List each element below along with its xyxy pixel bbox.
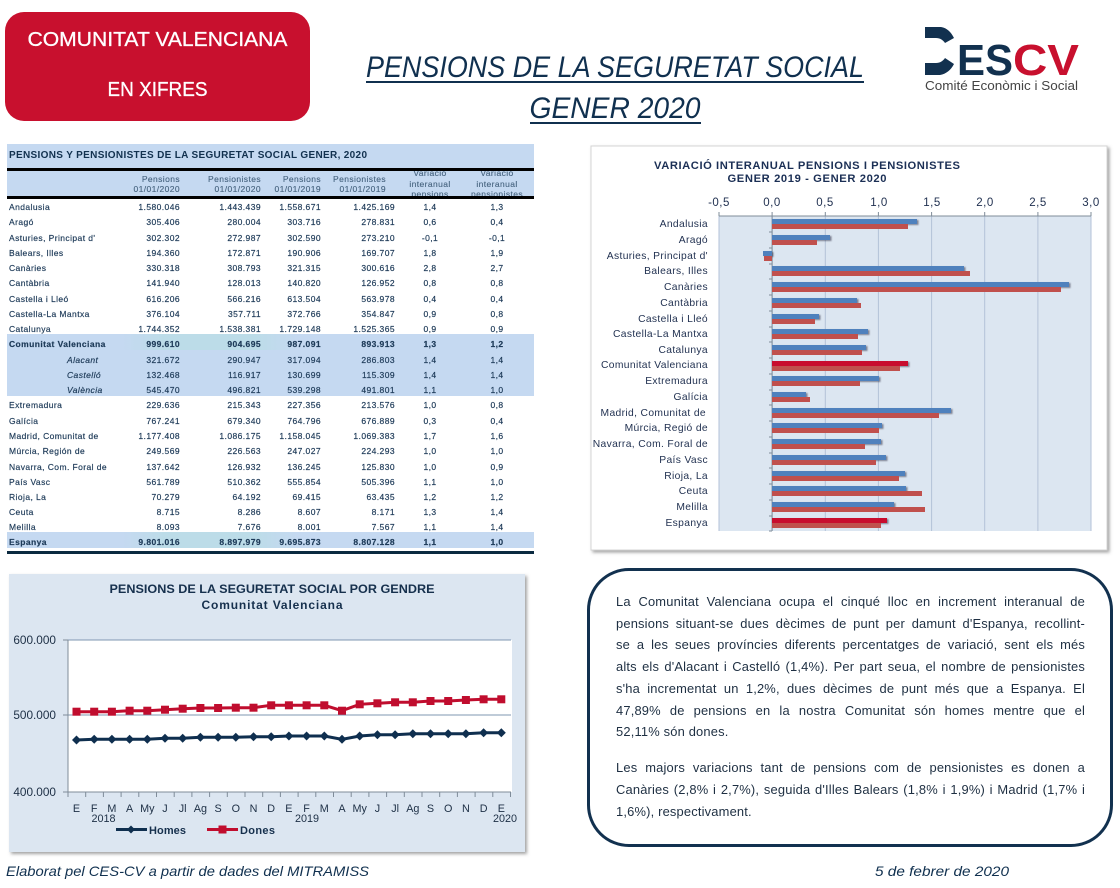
table rows: 1,4	[490, 370, 504, 380]
table rows: 1.443.439	[219, 202, 261, 212]
table rows: 8.607	[298, 507, 321, 517]
table title band	[7, 144, 534, 168]
table rows: País Vasc	[9, 477, 51, 487]
commentary text: se a les seues províncies diferents percentatges de variació, sent els més	[616, 637, 1085, 652]
table rows: 224.293	[361, 446, 395, 456]
bar chart axis labels: -0,5	[708, 197, 730, 209]
table rows: 7.676	[238, 522, 261, 532]
table rows: Canàries	[9, 263, 46, 273]
bar chart category labels	[593, 219, 708, 529]
line chart x axis labels	[73, 803, 517, 825]
table rows: 893.913	[361, 339, 395, 349]
table rows: Comunitat Valenciana	[9, 339, 106, 349]
table rows: 1.538.381	[219, 324, 261, 334]
table rows: 1,1	[423, 385, 437, 395]
table rows: 8.286	[238, 507, 261, 517]
line chart x axis labels: D	[480, 803, 488, 815]
table rows: 1.158.045	[279, 431, 321, 441]
commentary text: 52,11% són dones.	[616, 724, 728, 739]
table column headers: pensionistes	[471, 189, 523, 199]
table rows: 308.793	[227, 263, 261, 273]
bar chart category labels: Castella-La Mantxa	[613, 329, 708, 340]
line chart legend: Homes	[149, 825, 186, 837]
bar chart title	[654, 159, 961, 185]
bar chart category labels: Balears, Illes	[644, 266, 708, 277]
table rows: 302.302	[146, 233, 180, 243]
table rows: 321.315	[287, 263, 321, 273]
table rows: 128.013	[227, 278, 261, 288]
commentary text: Les majors variacions tant de pensions com de pensionistes es donen a	[616, 760, 1085, 775]
table rows: Navarra, Com. Foral de	[9, 462, 107, 472]
table column headers: 01/01/2020	[133, 184, 180, 194]
commentary text: 47,89% de pensions en la nostra Comunitat són homes mentre que el	[616, 703, 1085, 718]
table rows: 169.707	[361, 248, 395, 258]
bar chart axis labels: 0,0	[763, 197, 781, 209]
table rows: 676.889	[361, 416, 395, 426]
logo: CES CV	[925, 27, 1080, 93]
table rows: 63.435	[366, 492, 395, 502]
bar chart title: GENER 2019 - GENER 2020	[728, 173, 886, 185]
table rows: 561.789	[146, 477, 180, 487]
line chart x axis labels: F	[91, 803, 98, 815]
line chart x axis labels: 2019	[295, 813, 319, 825]
table rows: 1,0	[490, 385, 504, 395]
table rows: 1,4	[490, 507, 504, 517]
commentary text: 1,6%), respectivament.	[616, 804, 752, 819]
table rows: 1.580.046	[138, 202, 180, 212]
table rows: 249.569	[146, 446, 180, 456]
bar chart category labels: Aragó	[679, 235, 708, 246]
badge: Comunitat Valenciana en xifres	[5, 12, 310, 121]
commentary text: Canàries (2,8% i 2,7%), seguida d'Illes Balears (1,8% i 1,9%) i Madrid (1,7% i	[616, 782, 1085, 797]
line chart x axis labels: S	[427, 803, 434, 815]
table rows: 1,1	[423, 522, 437, 532]
line chart x axis labels: S	[214, 803, 222, 815]
table rows: 496.821	[227, 385, 261, 395]
line chart x axis labels: N	[250, 803, 257, 815]
table rows: 1,3	[423, 339, 437, 349]
table highlight: Comunitat Valenciana	[7, 334, 534, 396]
table rows: 0,8	[490, 400, 504, 410]
table rows: 8.001	[298, 522, 321, 532]
bar chart axis labels: 2,5	[1029, 197, 1047, 209]
table rows: -0,1	[489, 233, 505, 243]
line chart title: PENSIONS DE LA SEGURETAT SOCIAL POR GENDRE	[110, 582, 435, 596]
table rows: 0,8	[490, 278, 504, 288]
footer: date: 5 de febrer de 2020	[875, 863, 1009, 879]
table rows: 8.715	[157, 507, 180, 517]
table rows: 1,4	[490, 522, 504, 532]
logo: CES CV: ES	[957, 36, 1013, 85]
line chart title: Comunitat Valenciana	[202, 598, 343, 612]
table rows: 1.744.352	[138, 324, 180, 334]
line chart y axis labels: 500.000	[13, 708, 56, 722]
table rows: Madrid, Comunitat de	[9, 431, 99, 441]
table rows: 229.636	[146, 400, 180, 410]
table rows: 9.801.016	[138, 537, 180, 547]
badge: Comunitat Valenciana en xifres: EN XIFRES	[108, 78, 208, 101]
table rows: 357.711	[228, 309, 261, 319]
commentary text	[616, 594, 1085, 819]
footer: source: Elaborat pel CES-CV a partir de dades del MITRAMISS	[6, 863, 370, 879]
table highlight: Espanya	[7, 532, 534, 548]
table rows: 1,3	[423, 507, 437, 517]
line chart x axis labels: D	[267, 803, 275, 815]
table column headers: interanual	[476, 179, 518, 189]
table bottom rule	[7, 551, 534, 554]
table rows: 0,4	[490, 416, 504, 426]
panel: pensions table	[7, 144, 534, 554]
table rows: 505.396	[361, 477, 395, 487]
table rows: 1,8	[423, 248, 437, 258]
table rows: 1,0	[490, 446, 504, 456]
line chart x axis labels: O	[444, 803, 452, 815]
bar chart axis labels	[708, 197, 1100, 209]
table column headers: Pensions	[283, 174, 321, 184]
table rows: Catalunya	[9, 324, 51, 334]
table title band: PENSIONS Y PENSIONISTES DE LA SEGURETAT SOCIAL GENER, 2020	[9, 150, 367, 161]
commentary text: alts els d'Alacant i Castelló (1,4%). Per part seua, el nombre de pensionistes	[616, 659, 1085, 674]
table column headers: 01/01/2019	[274, 184, 321, 194]
table rows: 227.356	[287, 400, 321, 410]
table rows: 247.027	[287, 446, 321, 456]
table rows: 272.987	[227, 233, 261, 243]
line chart x axis labels: A	[338, 803, 346, 815]
line: Homes	[76, 733, 501, 740]
table rows: 273.210	[361, 233, 395, 243]
line chart x axis labels: Ag	[194, 803, 207, 815]
table rows: 1.558.671	[279, 202, 321, 212]
logo: CES CV: CV	[1013, 36, 1080, 85]
title: GENER 2020	[530, 92, 701, 125]
table column headers: Pensionistes	[333, 174, 386, 184]
bar chart axis labels: 3,0	[1082, 197, 1100, 209]
table rows: 679.340	[227, 416, 261, 426]
table column headers: interanual	[409, 179, 451, 189]
line chart x axis labels: A	[126, 803, 134, 815]
line chart x axis labels: My	[140, 803, 155, 815]
bar chart category labels: Navarra, Com. Foral de	[593, 439, 708, 450]
table rows: 130.699	[287, 370, 321, 380]
table rows: 0,9	[423, 324, 437, 334]
line chart y axis labels: 400.000	[13, 785, 56, 799]
table rows: 1,2	[490, 492, 504, 502]
line: Dones	[76, 699, 501, 712]
table rows: 0,8	[490, 309, 504, 319]
line chart x axis labels: Jl	[179, 803, 187, 815]
table rows: Rioja, La	[9, 492, 46, 502]
table rows: 354.847	[361, 309, 395, 319]
table rows: Espanya	[9, 537, 47, 547]
bar chart category labels: Ceuta	[679, 486, 708, 497]
table rows: 1,2	[423, 492, 437, 502]
table rows: 126.932	[227, 462, 261, 472]
table rows: 0,6	[423, 217, 437, 227]
bar chart plot area	[719, 212, 1091, 531]
table rows: 116.917	[228, 370, 261, 380]
panel: bar chart of interannual variation	[591, 146, 1107, 550]
table column headers: Pensions	[142, 174, 180, 184]
table rows: Cantàbria	[9, 278, 50, 288]
line chart y axis labels: 600.000	[13, 633, 56, 647]
table rows: 0,4	[490, 217, 504, 227]
table rows: 226.563	[227, 446, 261, 456]
table rows: Asturies, Principat d'	[9, 233, 95, 243]
table rows: Melilla	[9, 522, 36, 532]
line chart y axis labels	[13, 633, 56, 799]
line chart x axis labels: M	[320, 803, 329, 815]
table rows: Castelló	[67, 370, 101, 380]
table rows: València	[67, 385, 103, 395]
table rows: 372.766	[287, 309, 321, 319]
table rows: 64.192	[232, 492, 261, 502]
commentary text: La Comunitat Valenciana ocupa el cinqué lloc en increment interanual de	[616, 594, 1085, 609]
table rows: 9.695.873	[279, 537, 321, 547]
table rows: -0,1	[422, 233, 438, 243]
table rows: 1,7	[423, 431, 437, 441]
line chart title	[110, 582, 435, 612]
table rows: 1,0	[423, 446, 437, 456]
bar chart category labels: Asturies, Principat d'	[607, 251, 708, 262]
table rows: 8.807.128	[353, 537, 395, 547]
table rows: 0,9	[490, 324, 504, 334]
table rows: 140.820	[287, 278, 321, 288]
line chart x axis labels: E	[73, 803, 80, 815]
table rows: 999.610	[146, 339, 180, 349]
table rows: 305.406	[146, 217, 180, 227]
bar chart category labels: Espanya	[665, 518, 708, 529]
panel: line chart of pensions by gender	[9, 574, 525, 852]
table rows: 1.177.408	[138, 431, 180, 441]
table rows: 1,4	[423, 202, 437, 212]
table rows: 1,0	[490, 477, 504, 487]
bar chart category labels: Catalunya	[658, 345, 708, 356]
table rows: 616.206	[146, 294, 180, 304]
line chart x axis labels: 2020	[493, 813, 517, 825]
line chart x axis labels: E	[498, 803, 505, 815]
table rows: 1,4	[490, 355, 504, 365]
table rows: 545.470	[146, 385, 180, 395]
table rows: 7.567	[372, 522, 395, 532]
line chart x axis labels: N	[462, 803, 470, 815]
table rows: 317.094	[287, 355, 321, 365]
table rows: Múrcia, Región de	[9, 446, 85, 456]
badge: Comunitat Valenciana en xifres: COMUNITAT VALENCIANA	[28, 28, 288, 51]
line chart x axis labels: M	[107, 803, 116, 815]
table rows: 321.672	[146, 355, 180, 365]
bar chart category labels: Cantàbria	[660, 298, 708, 309]
line chart x axis labels: J	[375, 803, 380, 815]
table rows: 0,3	[423, 416, 437, 426]
bar chart category labels: Galícia	[674, 392, 708, 403]
table rows: Ceuta	[9, 507, 34, 517]
table rows: 563.978	[361, 294, 395, 304]
table rows: Castella-La Mantxa	[9, 309, 90, 319]
table rows: Extremadura	[9, 400, 62, 410]
table rows: 300.616	[361, 263, 395, 273]
table rows: Alacant	[66, 355, 99, 365]
table rows	[9, 202, 505, 547]
table rows: 0,4	[423, 294, 437, 304]
table rows: 125.830	[361, 462, 395, 472]
table rows: 303.716	[287, 217, 321, 227]
table rows: 1.525.365	[353, 324, 395, 334]
table rows: Aragó	[9, 217, 34, 227]
table rows: 330.318	[146, 263, 180, 273]
bar chart category labels: Comunitat Valenciana	[601, 360, 708, 371]
table column headers: 01/01/2019	[339, 184, 386, 194]
table rows: 987.091	[287, 339, 321, 349]
table rows: 0,8	[423, 278, 437, 288]
table rows: 137.642	[146, 462, 180, 472]
table column headers: pensions	[411, 189, 449, 199]
commentary text: s'ha incrementat un 1,2%, dues dècimes de punt més que a Espanya. El	[616, 681, 1085, 696]
table rows: 1,3	[490, 202, 504, 212]
table rows: 141.940	[146, 278, 180, 288]
table rows: 1,4	[423, 355, 437, 365]
line chart legend: Dones	[240, 825, 275, 837]
line chart x axis labels: E	[285, 803, 293, 815]
bar chart category labels: Extremadura	[645, 376, 708, 387]
table rows: 1,1	[423, 477, 437, 487]
table rows: 1,9	[490, 248, 504, 258]
bar chart category labels: Melilla	[676, 502, 708, 513]
table rows: 510.362	[227, 477, 261, 487]
bar chart axis labels: 1,0	[870, 197, 888, 209]
table rows: 302.590	[287, 233, 321, 243]
bar chart axis labels: 0,5	[816, 197, 834, 209]
line chart x axis labels: F	[303, 803, 310, 815]
table rows: 613.504	[287, 294, 321, 304]
title	[366, 51, 864, 125]
commentary text: pensions situant-se dues dècimes de punt per damunt d'Espanya, recollint-	[616, 616, 1085, 631]
table rows: 8.897.979	[219, 537, 261, 547]
line chart x axis labels: O	[232, 803, 240, 815]
table rows: 1,2	[490, 339, 504, 349]
table column headers: Pensionistes	[208, 174, 261, 184]
line chart x axis labels: J	[162, 803, 168, 815]
line chart plot area	[63, 640, 512, 797]
table rows: 0,9	[423, 309, 437, 319]
bar chart category labels: País Vasc	[659, 455, 708, 466]
table rows: Castella i Lleó	[9, 294, 69, 304]
table rows: 767.241	[146, 416, 180, 426]
table rows: 213.576	[361, 400, 395, 410]
table rows: 2,7	[490, 263, 504, 273]
table rows: 215.343	[227, 400, 261, 410]
table rows: 1,1	[423, 537, 437, 547]
table column headers: 01/01/2020	[214, 184, 261, 194]
table rows: 8.171	[372, 507, 395, 517]
table rows: 1,0	[423, 400, 437, 410]
table rows: 290.947	[227, 355, 261, 365]
line chart x axis labels: Jl	[391, 803, 399, 815]
table rows: 566.216	[227, 294, 261, 304]
table rows: 190.906	[287, 248, 321, 258]
table rows: 764.796	[287, 416, 321, 426]
table rows: 1,0	[490, 537, 504, 547]
table column headers: Variació	[413, 168, 447, 178]
line chart legend	[116, 825, 275, 837]
table rows: 1.425.169	[353, 202, 395, 212]
table rows: 132.468	[146, 370, 180, 380]
table rows: 115.309	[362, 370, 395, 380]
table rows: Andalusia	[9, 202, 50, 212]
line chart x axis labels: Ag	[406, 803, 419, 815]
bar chart category labels: Castella i Lleó	[638, 314, 708, 325]
bar chart title: VARIACIÓ INTERANUAL PENSIONS I PENSIONISTES	[654, 159, 961, 172]
table rows: 1.086.175	[219, 431, 261, 441]
table rows: Balears, Illes	[9, 248, 64, 258]
table rows: 1,6	[490, 431, 504, 441]
bar chart category labels: Rioja, La	[664, 471, 708, 482]
table rows: 126.952	[361, 278, 395, 288]
bar chart axis labels: 1,5	[923, 197, 941, 209]
bar chart axis labels: 2,0	[976, 197, 994, 209]
table rows: Galícia	[9, 416, 38, 426]
table rows: 136.245	[287, 462, 321, 472]
table rows: 1.729.148	[279, 324, 321, 334]
line chart x axis labels: My	[352, 803, 367, 815]
table column headers	[7, 168, 534, 199]
table rows: 1,0	[423, 462, 437, 472]
table rows: 1,4	[423, 370, 437, 380]
logo: CES CV: Comité Econòmic i Social	[925, 78, 1078, 93]
bars: pensions	[763, 219, 1069, 523]
table rows: 2,8	[423, 263, 437, 273]
table column headers: Variació	[480, 168, 514, 178]
table rows: 539.298	[287, 385, 321, 395]
table rows: 69.415	[292, 492, 321, 502]
bars: pensionistes	[764, 224, 1061, 528]
table rows: 70.279	[151, 492, 180, 502]
bar chart category labels: Madrid, Comunitat de	[601, 408, 706, 419]
bar chart category labels: Andalusia	[660, 219, 708, 230]
table rows: 1.069.383	[353, 431, 395, 441]
table rows: 280.004	[227, 217, 261, 227]
line chart x axis labels: 2018	[91, 813, 116, 825]
table rows: 172.871	[227, 248, 261, 258]
table rows: 376.104	[146, 309, 180, 319]
table rows: 555.854	[287, 477, 321, 487]
panel: commentary frame	[587, 568, 1113, 847]
table rows: 278.831	[361, 217, 395, 227]
table rows: 194.360	[146, 248, 180, 258]
table rows: 904.695	[227, 339, 261, 349]
table rows: 286.803	[361, 355, 395, 365]
table rows: 0,9	[490, 462, 504, 472]
table rows: 491.801	[361, 385, 395, 395]
table rows: 8.093	[157, 522, 180, 532]
bar chart category labels: Múrcia, Regió de	[625, 423, 708, 434]
title: PENSIONS DE LA SEGURETAT SOCIAL	[366, 51, 864, 84]
bar chart category labels: Canàries	[664, 282, 708, 293]
table rows: 0,4	[490, 294, 504, 304]
